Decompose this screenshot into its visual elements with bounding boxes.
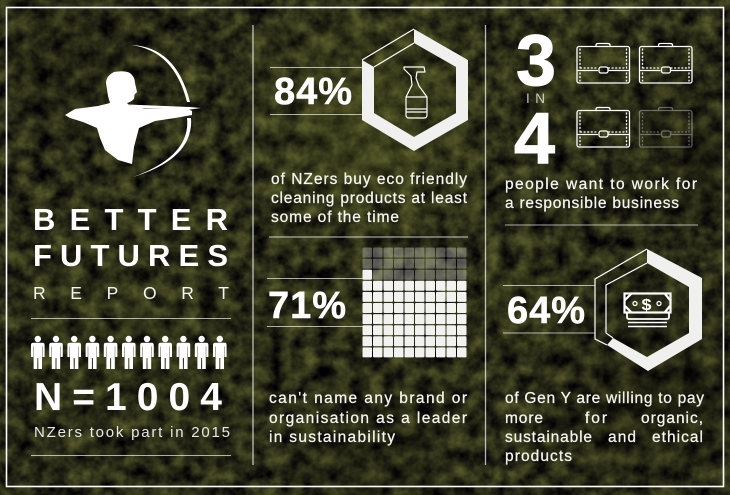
icon: money stack: [624, 294, 670, 326]
text: brand leader: can't name any brand or: [269, 390, 467, 407]
heading: better futures report: REPORT: [33, 283, 229, 303]
stat: 84%: 84%: [274, 71, 352, 113]
text: Gen Y: products: [505, 448, 572, 465]
icon: archer logo: [65, 45, 201, 177]
text: responsible business: [505, 176, 697, 212]
text: brand leader: in sustainability: [269, 429, 395, 446]
caption: NZers took part in 2015: [34, 424, 230, 441]
panel: Gen Y: [503, 249, 704, 465]
icon: spray bottle: [404, 67, 427, 118]
icon: row of people: [31, 336, 227, 369]
text: Gen Y: organic,: [641, 410, 703, 427]
panel: eco cleaning: [269, 29, 468, 237]
text: brand leader: [269, 390, 467, 446]
icon: four briefcases: [577, 44, 692, 147]
text: eco cleaning: [271, 171, 468, 226]
text: responsible business: people want to work for: [505, 176, 697, 193]
panel: report identity: [31, 45, 231, 456]
text: Gen Y: of Gen Y are willing to pay: [505, 390, 704, 407]
stat: 71%: 71%: [268, 285, 346, 327]
chart: hexagon 84%: [362, 29, 468, 151]
text: Gen Y: and: [608, 429, 636, 446]
text: Gen Y: more: [505, 410, 543, 427]
text: eco cleaning: cleaning products at least: [271, 190, 468, 207]
text: Gen Y: for: [585, 410, 607, 427]
stat: 64%: 64%: [507, 290, 585, 332]
sample size: N=1004: [34, 376, 222, 419]
stat: 3 in 4: 3: [516, 21, 556, 101]
heading: better futures report: FUTURES: [33, 238, 228, 273]
panel: 3 in 4: [505, 21, 698, 225]
text: eco cleaning: some of the time: [271, 209, 399, 226]
text: responsible business: a responsible business: [505, 195, 679, 212]
chart: hexagon 64%: [595, 249, 702, 371]
stat: 3 in 4: 4: [514, 99, 555, 179]
heading: better futures report: BETTER: [33, 202, 228, 237]
text: Gen Y: ethical: [652, 429, 703, 446]
text: brand leader: organisation as a leader: [269, 410, 467, 427]
chart: waffle 71 of 100: [362, 248, 466, 357]
text: eco cleaning: of NZers buy eco friendly: [271, 171, 467, 188]
text: Gen Y: sustainable: [505, 429, 592, 446]
icon: money stack: $: [642, 297, 652, 314]
text: Gen Y: [505, 390, 704, 465]
panel: brand leader: [267, 248, 467, 446]
heading: better futures report: [33, 202, 229, 303]
stat: 3 in 4: IN: [526, 91, 545, 106]
column dividers: [253, 25, 486, 465]
stat: 3 in 4: [514, 21, 556, 179]
